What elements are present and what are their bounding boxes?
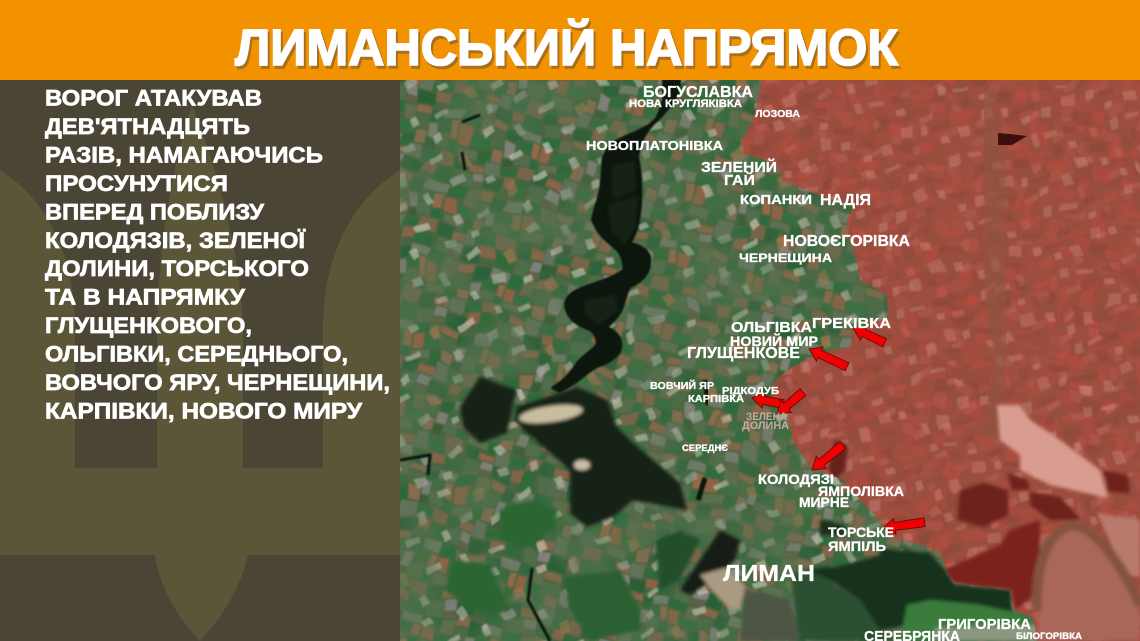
map: field mosaic bbox=[370, 50, 1140, 641]
map: dark forests and sand tract in the occupied zone bbox=[828, 405, 1140, 641]
map labels: settlements: ЧЕРНЕЩИНА bbox=[739, 251, 832, 265]
text block: enemy attacks summary: ГЛУЩЕНКОВОГО, bbox=[45, 313, 252, 338]
map labels: settlements: МИРНЕ bbox=[799, 494, 849, 510]
map: forests west of Lyman bbox=[445, 377, 800, 641]
text block: enemy attacks summary: ВОРОГ АТАКУВАВ bbox=[45, 86, 262, 110]
map labels: settlements: НОВИЙ МИР bbox=[730, 332, 818, 349]
map labels: settlements: ГЛУЩЕНКОВЕ bbox=[687, 345, 800, 362]
map labels: settlements: ГРИГОРІВКА bbox=[938, 616, 1031, 633]
map labels: settlements: ЯМПОЛІВКА bbox=[818, 483, 904, 499]
text block: enemy attacks summary: ВПЕРЕД ПОБЛИЗУ bbox=[45, 199, 265, 224]
map labels: settlements: НОВОЄГОРІВКА bbox=[783, 233, 910, 250]
text block: enemy attacks summary: ВОВЧОГО ЯРУ, ЧЕРНЕЩИНИ, bbox=[45, 370, 390, 395]
map labels: settlements: НОВОПЛАТОНІВКА bbox=[586, 138, 724, 153]
panel: left text panel bbox=[0, 80, 400, 641]
map labels: settlements: ЗЕЛЕНА bbox=[746, 411, 787, 423]
map labels: settlements: ДОЛИНА bbox=[742, 420, 789, 432]
map labels: settlements: КОПАНКИ bbox=[740, 192, 812, 207]
text block: enemy attacks summary: КОЛОДЯЗІВ, ЗЕЛЕНОЇ bbox=[45, 228, 306, 253]
emblem: trident watermark bbox=[0, 106, 400, 641]
map labels: settlements: РІДКОДУБ bbox=[722, 386, 779, 397]
map labels: settlements: ГРЕКІВКА bbox=[812, 315, 891, 332]
header band bbox=[0, 0, 1140, 80]
map labels: settlements: КАРПІВКА bbox=[688, 394, 744, 405]
map: occupied territory overlay bbox=[740, 80, 1140, 641]
map: town corridor bbox=[985, 90, 1005, 440]
map labels: settlements: КОЛОДЯЗІ bbox=[758, 471, 834, 487]
arrows: enemy attack directions bbox=[750, 321, 926, 536]
text block: enemy attacks summary: ДОЛИНИ, ТОРСЬКОГО bbox=[45, 256, 309, 281]
title: ЛИМАНСЬКИЙ НАПРЯМОК bbox=[237, 21, 901, 79]
map labels: settlements: НОВА КРУГЛЯКІВКА bbox=[629, 98, 742, 110]
map labels: settlements: ЛИМАН bbox=[723, 560, 815, 586]
map: dark pond bbox=[998, 133, 1027, 145]
title: ЛИМАНСЬКИЙ НАПРЯМОК bbox=[235, 18, 899, 76]
text block: enemy attacks summary: РАЗІВ, НАМАГАЮЧИСЬ bbox=[45, 142, 323, 167]
panel: satellite map bbox=[370, 50, 1140, 641]
map labels: settlements: ВОВЧИЙ ЯР bbox=[650, 379, 714, 392]
text block: enemy attacks summary: ПРОСУНУТИСЯ bbox=[45, 171, 228, 196]
map labels: settlements: ГАЙ bbox=[724, 171, 755, 189]
text block: enemy attacks summary: ТА В НАПРЯМКУ bbox=[45, 285, 246, 310]
map labels: settlements: ЛОЗОВА bbox=[755, 109, 800, 120]
map labels: settlements: СЕРЕДНЄ bbox=[682, 443, 728, 454]
text block: enemy attacks summary bbox=[45, 86, 390, 424]
map labels: settlements: БОГУСЛАВКА bbox=[643, 84, 753, 101]
map labels: settlements: ТОРСЬКЕ bbox=[828, 524, 894, 540]
text block: enemy attacks summary: ОЛЬГІВКИ, СЕРЕДНЬОГО, bbox=[45, 342, 348, 367]
text block: enemy attacks summary: ДЕВ'ЯТНАДЦЯТЬ bbox=[45, 114, 250, 139]
map labels: settlements: ЯМПІЛЬ bbox=[828, 538, 886, 554]
map labels: settlements: ЗЕЛЕНИЙ bbox=[701, 158, 777, 176]
map: reservoir and river bbox=[400, 80, 708, 641]
map: forests south-east of Lyman bbox=[790, 520, 1040, 641]
map labels: settlements: ОЛЬГІВКА bbox=[731, 319, 812, 336]
map: islands in the reservoir bbox=[585, 160, 638, 325]
map labels: settlements bbox=[586, 84, 1082, 641]
map labels: settlements: НАДІЯ bbox=[820, 192, 871, 209]
text block: enemy attacks summary: КАРПІВКИ, НОВОГО МИРУ bbox=[45, 398, 363, 424]
